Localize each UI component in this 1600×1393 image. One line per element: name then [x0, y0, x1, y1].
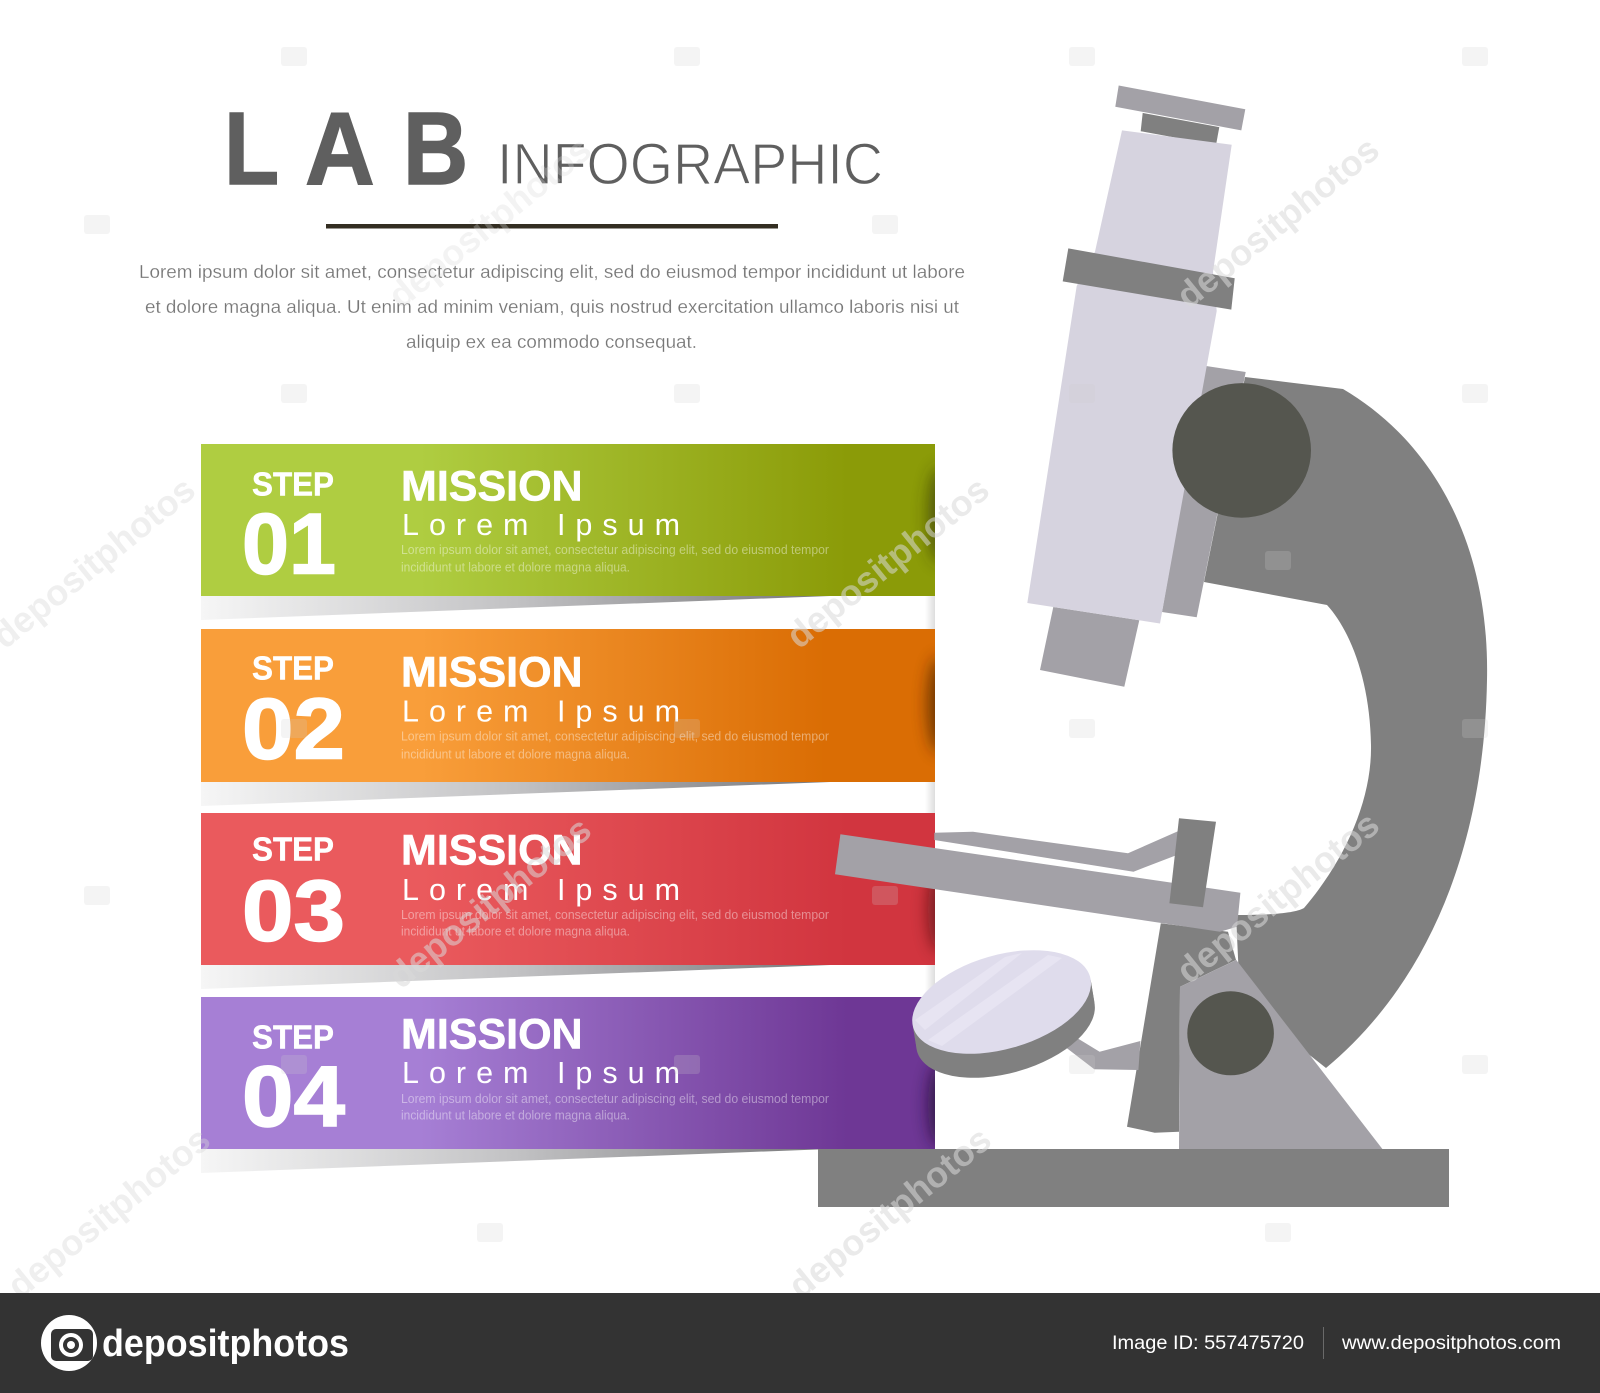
panel: step 02: Lorem Ipsum: [402, 695, 680, 729]
panel: step 02: incididunt ut labore et dolore magna aliqua.: [401, 746, 630, 761]
intro paragraph: aliquip ex ea commodo consequat.: [406, 331, 697, 352]
title: A: [305, 92, 375, 207]
panel: step 04: Lorem Ipsum: [402, 1056, 680, 1090]
watermark: depositphotos: [380, 128, 599, 316]
microscope eyepiece neck: [1141, 113, 1219, 145]
watermark: depositphotos: [778, 468, 997, 656]
panel: step 03: STEP: [252, 831, 334, 868]
panel: step 03: Lorem Ipsum: [402, 873, 680, 907]
icon: camera logo: [41, 1315, 97, 1371]
microscope eyepiece cap: [1115, 86, 1245, 130]
panel: step 01: incididunt ut labore et dolore magna aliqua.: [401, 560, 630, 575]
panel: step 03: incididunt ut labore et dolore magna aliqua.: [401, 924, 630, 939]
panel: step 01: 01: [242, 496, 336, 592]
panel: step 02: MISSION: [401, 648, 583, 696]
title underline: [326, 224, 778, 228]
watermark: depositphotos: [1168, 803, 1387, 991]
microscope triangular foot: [1179, 960, 1382, 1149]
microscope base: [818, 1149, 1449, 1207]
microscope pillar: [1127, 923, 1236, 1133]
microscope tube back plate: [1162, 366, 1246, 617]
panel: step 03: [201, 813, 952, 997]
panel: step 04: MISSION: [401, 1011, 583, 1059]
intro paragraph: Lorem ipsum dolor sit amet, consectetur adipiscing elit, sed do eiusmod tempor incididunt ut labore: [139, 261, 965, 282]
microscope focus knob: [1172, 383, 1311, 518]
footer bar: [0, 1293, 1600, 1393]
icon: microscope: [818, 86, 1487, 1207]
panel: step 03: MISSION: [401, 827, 583, 875]
panel: step 02: Lorem ipsum dolor sit amet, consectetur adipiscing elit, sed do eiusmod tempor: [401, 729, 830, 744]
panel: step 04: [201, 997, 952, 1173]
footer separator: [1323, 1327, 1324, 1359]
panel: step 01: [201, 444, 952, 629]
panel: step 03: 03: [242, 864, 345, 960]
title: B: [403, 90, 468, 206]
watermark camera icons: [84, 47, 1488, 1242]
footer logo wordmark: depositphotos: [102, 1323, 349, 1365]
panel: step 01: MISSION: [401, 463, 583, 511]
watermark: depositphotos: [780, 1118, 999, 1306]
panel: step 02: 02: [242, 682, 345, 778]
panel: step 04: STEP: [252, 1019, 334, 1056]
microscope mirror arm: [1065, 1037, 1140, 1070]
microscope objective lens: [1040, 607, 1139, 687]
microscope arm: [1204, 377, 1487, 1068]
microscope stage clip: [934, 829, 1188, 872]
panel: step 04: 04: [242, 1049, 345, 1145]
title: INFOGRAPHIC: [497, 132, 883, 197]
intro paragraph: et dolore magna aliqua. Ut enim ad minim veniam, quis nostrud exercitation ullamco laboris nisi ut: [145, 296, 959, 317]
panel: step 02: [201, 629, 952, 813]
panel: step 02: STEP: [252, 649, 334, 686]
microscope stage post: [1169, 818, 1216, 907]
microscope mirror: [900, 931, 1107, 1097]
title: L: [224, 90, 279, 206]
intro paragraph: [139, 261, 965, 352]
panel: step 03: Lorem ipsum dolor sit amet, consectetur adipiscing elit, sed do eiusmod tempor: [401, 907, 830, 922]
microscope collar: [1063, 248, 1235, 310]
footer image id: Image ID: 557475720: [1112, 1332, 1304, 1354]
watermark: depositphotos: [1168, 128, 1387, 316]
watermark: depositphotos: [0, 1118, 218, 1306]
microscope lower knob: [1187, 991, 1274, 1075]
microscope tube: [1027, 130, 1232, 624]
microscope stage: [835, 834, 1240, 932]
watermark: [0, 128, 1387, 1306]
panel: step 04: Lorem ipsum dolor sit amet, consectetur adipiscing elit, sed do eiusmod tempor: [401, 1091, 830, 1106]
panel: step 01: Lorem ipsum dolor sit amet, consectetur adipiscing elit, sed do eiusmod tempor: [401, 542, 830, 557]
watermark: depositphotos: [380, 808, 599, 996]
panel: step 04: incididunt ut labore et dolore magna aliqua.: [401, 1108, 630, 1123]
title: [224, 90, 883, 207]
panel: step 01: Lorem Ipsum: [402, 508, 680, 542]
footer website: www.depositphotos.com: [1341, 1332, 1561, 1354]
panel: step 01: STEP: [252, 466, 334, 503]
